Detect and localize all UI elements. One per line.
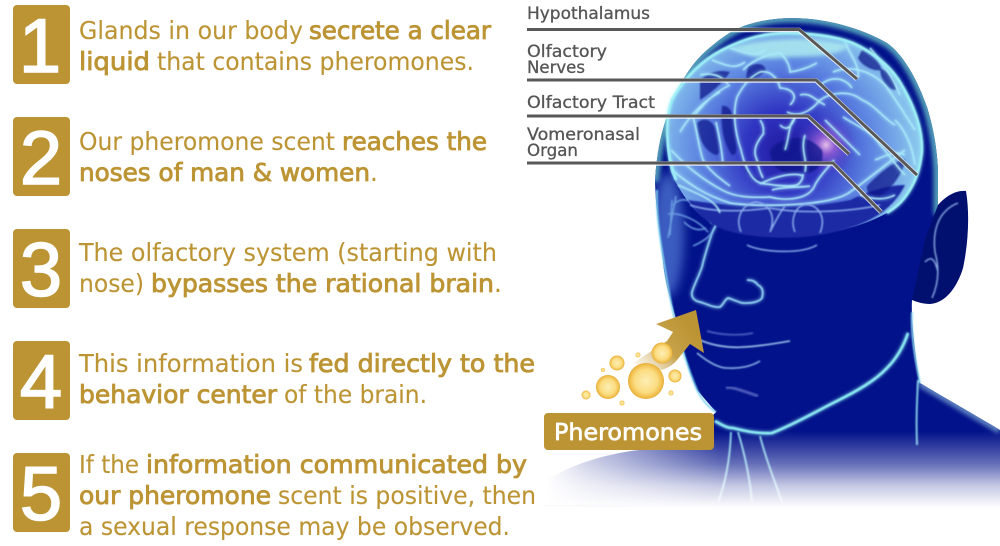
step 1 text: secrete a clear bbox=[309, 16, 492, 45]
step 5 text: our pheromone bbox=[79, 481, 271, 510]
label: Olfactory Nerves: Olfactory bbox=[527, 42, 607, 61]
step 4 text: fed directly to the bbox=[309, 349, 535, 378]
label: Vomeronasal Organ: Vomeronasal bbox=[527, 125, 640, 144]
number badge 1: 1 bbox=[19, 4, 61, 89]
step 5 text: scent is positive, then bbox=[278, 481, 536, 510]
step 1 text: liquid bbox=[79, 47, 150, 76]
ear detail bbox=[925, 203, 958, 298]
label: Olfactory Tract: Olfactory Tract bbox=[527, 93, 656, 112]
left face lighter area bbox=[652, 173, 684, 297]
temple vein bbox=[678, 185, 720, 213]
shaded inner layers clipped to head bbox=[652, 18, 1000, 430]
head and shoulders silhouette bbox=[557, 18, 1000, 504]
step 4 text: behavior center bbox=[79, 380, 278, 409]
step 3 text: The olfactory system (starting with bbox=[78, 238, 497, 267]
jaw line bbox=[715, 333, 908, 433]
face left edge glow bbox=[657, 190, 716, 412]
number badge 4: 4 bbox=[20, 340, 62, 425]
number badge 5: 5 bbox=[20, 452, 62, 537]
step 3 text: bypasses the rational brain bbox=[151, 269, 494, 298]
step 1 text: that contains pheromones. bbox=[157, 47, 474, 76]
arrow pointing to nose bbox=[633, 310, 704, 370]
step 3 text: nose) bbox=[79, 269, 144, 298]
pale crown of the brain bbox=[730, 39, 850, 58]
step 3 bbox=[13, 228, 502, 313]
step 1 text: Glands in our body bbox=[79, 16, 303, 45]
lower brain lobes bbox=[690, 202, 880, 251]
badge: Pheromones bbox=[544, 413, 714, 450]
step 4 text: This information is bbox=[78, 349, 303, 378]
crown rim shading bbox=[655, 18, 938, 215]
step 2 bbox=[13, 116, 487, 201]
deep shadows bbox=[697, 50, 905, 198]
nose outline bbox=[688, 224, 766, 311]
step 4 bbox=[13, 340, 535, 425]
brain outer glow rim bbox=[667, 33, 922, 213]
brain purple glow bbox=[802, 120, 850, 170]
step 2 text: noses of man & women bbox=[79, 158, 370, 187]
eye bbox=[668, 196, 712, 246]
step 5 text: If the bbox=[79, 450, 139, 479]
brain underside band bbox=[688, 185, 905, 238]
label: Hypothalamus: Hypothalamus bbox=[527, 4, 650, 23]
step 2 text: reaches the bbox=[342, 127, 487, 156]
badge: Pheromones: Pheromones bbox=[554, 418, 702, 446]
shoulder rim bbox=[920, 383, 1000, 430]
chin shading bbox=[726, 387, 758, 396]
step 5 bbox=[13, 450, 536, 541]
ear bbox=[912, 191, 968, 304]
neck lines bbox=[718, 312, 920, 502]
step 4 text: of the brain. bbox=[284, 380, 427, 409]
label: Vomeronasal Organ: Organ bbox=[527, 141, 578, 160]
step 1 bbox=[13, 4, 492, 89]
step 5 text: a sexual response may be observed. bbox=[79, 512, 510, 541]
step 3 text: . bbox=[494, 269, 502, 298]
step 5 text: information communicated by bbox=[146, 450, 527, 479]
brain labels bbox=[527, 4, 656, 160]
label leader lines bbox=[527, 30, 917, 212]
step 2 text: . bbox=[370, 158, 378, 187]
mouth and lips bbox=[697, 331, 790, 368]
step 2 text: Our pheromone scent bbox=[79, 127, 335, 156]
brain body bbox=[667, 33, 922, 236]
illustration: blue head with glowing brain bbox=[557, 18, 1000, 504]
pheromone droplets bbox=[582, 342, 682, 406]
number badge 2: 2 bbox=[20, 116, 62, 201]
brain lobes lines bbox=[671, 42, 915, 205]
label: Olfactory Nerves: Nerves bbox=[527, 58, 585, 77]
left shoulder whitening bbox=[545, 450, 712, 504]
number badge 3: 3 bbox=[20, 228, 62, 313]
